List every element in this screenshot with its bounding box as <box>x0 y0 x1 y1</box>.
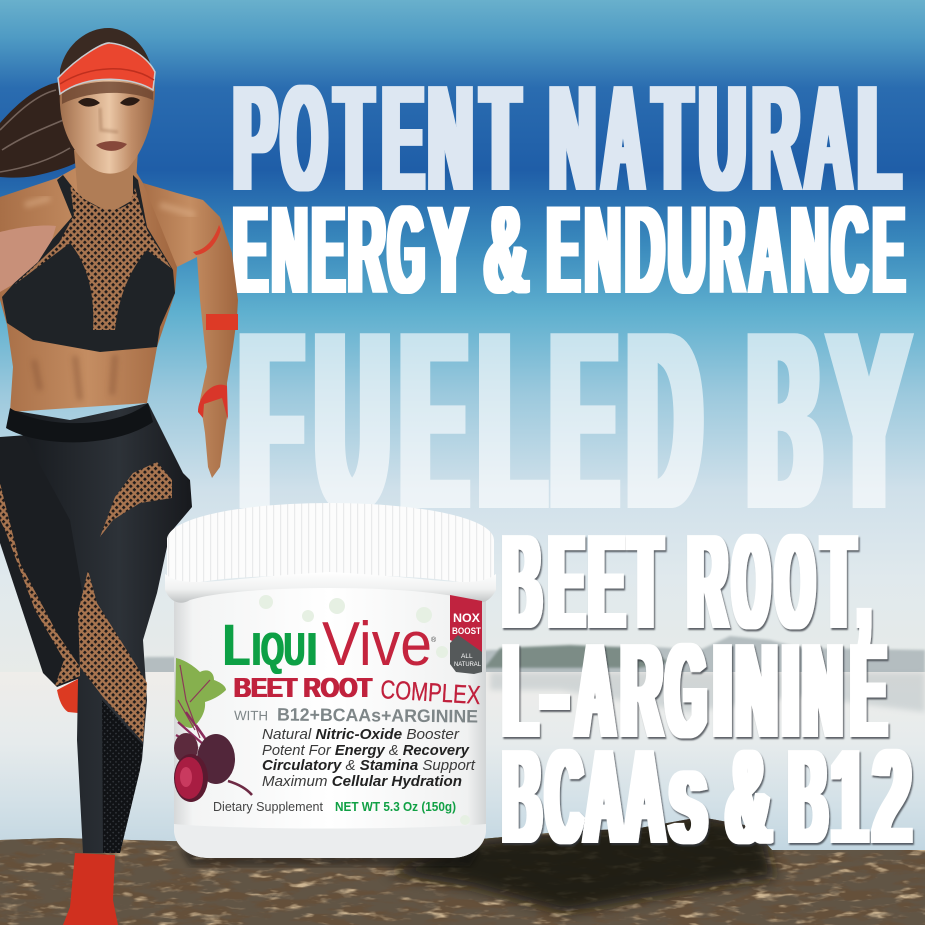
headline: energy and endurance: E <box>547 181 580 320</box>
headline: potent natural: U <box>700 53 746 222</box>
runner: front leg mesh lower <box>78 570 147 742</box>
jar: net weight: NET WT 5.3 Oz (150g) <box>335 799 456 814</box>
runner: shoulder highlights <box>25 198 195 215</box>
ingredient: l-arginine: N <box>736 615 777 766</box>
ingredient: bcaas and b12: A <box>584 721 624 872</box>
headline: energy and endurance: D <box>625 181 664 320</box>
headline: energy and endurance: R <box>348 181 386 320</box>
runner: mouth <box>96 141 127 151</box>
headline: fueled by: U <box>317 278 388 562</box>
headline: potent natural: T <box>482 53 520 222</box>
jar: lower shading <box>174 824 486 858</box>
headline: energy and endurance: Y <box>430 181 468 320</box>
beet: back bulb <box>174 733 198 763</box>
headline: energy and endurance: N <box>272 181 308 320</box>
jar: ground shadow <box>180 850 480 866</box>
headline: energy and endurance: G <box>388 181 424 320</box>
headline: energy and endurance: N <box>585 181 620 320</box>
runner: wristband <box>206 314 238 330</box>
ingredient: l-arginine: L <box>503 615 537 766</box>
runner: rear leg mesh <box>0 483 80 686</box>
jar: nox boost badge: NATURAL <box>454 661 481 668</box>
beet: stems <box>176 712 206 748</box>
ingredient: beet root: O <box>733 506 769 657</box>
runner figure <box>0 28 238 925</box>
headline: fueled by: F <box>241 278 301 562</box>
runner: rear leg <box>0 432 85 687</box>
headline: fueled by: D <box>629 278 700 562</box>
jar: nox boost badge: ALL <box>461 653 473 660</box>
ingredient: beet root: B <box>503 506 541 657</box>
jar: nox boost badge: BOOST <box>452 626 481 636</box>
jar: nox boost badge: NOX <box>453 611 480 625</box>
headline: energy and endurance: C <box>832 181 868 320</box>
jar: dietary supplement: Dietary Supplement <box>213 799 323 814</box>
ingredient: bcaas and b12: s <box>669 721 707 872</box>
runner: front hand <box>0 225 56 292</box>
runner: front leg <box>10 403 192 853</box>
background: sky <box>0 0 925 680</box>
ingredient: bcaas and b12: C <box>546 721 582 872</box>
headline: energy and endurance: E <box>233 181 268 320</box>
runner: front leg mesh upper <box>100 462 172 537</box>
jar: body <box>174 585 486 858</box>
ingredient: bcaas and b12: B <box>789 721 827 872</box>
headline: fueled by: E <box>552 278 616 562</box>
runner: wrist wrap <box>198 385 228 420</box>
runner: shin panel <box>102 700 143 853</box>
headline: energy and endurance: N <box>791 181 828 320</box>
runner: hair <box>60 28 153 84</box>
ingredient: bcaas and b12: B <box>503 721 541 872</box>
runner: visor shadow <box>62 82 153 104</box>
brand: liqui: Q <box>261 623 284 675</box>
background: hill reflection <box>490 672 925 712</box>
headline: energy and endurance: A <box>750 181 786 320</box>
ingredient: bcaas and b12: 1 <box>831 721 867 872</box>
beet: leaves <box>175 658 226 728</box>
headline: energy and endurance: U <box>668 181 706 320</box>
background: sandy beach <box>0 815 925 925</box>
jar: nox boost badge <box>450 595 482 674</box>
jar: beetroot illustration <box>174 658 252 802</box>
runner: waistband <box>6 403 153 442</box>
runner: bra <box>2 175 175 352</box>
ingredient: beet root: T <box>630 506 662 657</box>
background: distant hills <box>0 636 925 682</box>
runner: ponytail <box>0 82 78 178</box>
ingredient: l-arginine: I <box>782 615 799 766</box>
headline: energy and endurance: E <box>312 181 344 320</box>
jar: brand name <box>223 610 437 679</box>
ingredient: beet root: T <box>822 506 854 657</box>
title: complex: COMPLEX <box>380 674 481 710</box>
brand: vive: Vive <box>322 610 432 679</box>
beet: cut slice <box>174 754 208 802</box>
beet: leaf veins <box>178 665 210 738</box>
runner: boot <box>63 853 118 925</box>
jar: decorative molecule dots <box>259 595 470 825</box>
runner: raised foot <box>57 678 80 713</box>
runner: visor fold <box>60 69 154 84</box>
headline: potent natural: E <box>382 53 424 222</box>
runner: head <box>60 78 155 174</box>
beet: main bulb <box>197 734 235 784</box>
jar: subtitle: WITH <box>234 708 268 723</box>
headline: potent natural: P <box>234 53 276 222</box>
brand: registered mark: ® <box>431 636 437 644</box>
jar: product title <box>234 672 481 710</box>
ingredient: bcaas and b12: A <box>624 721 664 872</box>
headline: potent natural: T <box>654 53 692 222</box>
ingredient: beet root: R <box>688 506 727 657</box>
brand: liqui: L <box>223 613 250 678</box>
headline: potent natural: N <box>550 53 596 222</box>
runner: abdomen shading <box>34 355 115 400</box>
runner: torso <box>0 167 177 412</box>
runner: nose shadow <box>100 108 118 132</box>
headline: energy and endurance: & <box>484 181 528 320</box>
runner: neck <box>74 150 138 214</box>
runner: visor <box>58 43 155 94</box>
title: beet root: BEET ROOT <box>234 672 372 703</box>
runner: armband upper <box>193 225 221 255</box>
jar: benefit lines <box>262 726 476 790</box>
headline: fueled by: L <box>480 278 544 562</box>
ingredient list <box>503 506 911 872</box>
runner: bra mesh <box>14 184 171 330</box>
headline: potent natural: R <box>752 53 800 222</box>
beet: root tail <box>228 781 252 795</box>
headline: potent natural: A <box>806 53 852 222</box>
ingredient: l-arginine: G <box>666 615 706 766</box>
ingredient: l-arginine: A <box>576 615 614 766</box>
ingredient: l-arginine: I <box>713 615 732 766</box>
ingredient: l-arginine: - <box>540 615 569 766</box>
ingredient: bcaas and b12: & <box>726 721 771 872</box>
brand: liqui: U <box>284 623 305 675</box>
brand: liqui: I <box>307 623 317 675</box>
headline: energy and endurance: R <box>710 181 744 320</box>
headline: fueled by: E <box>402 278 466 562</box>
background: lake <box>0 672 925 850</box>
jar: lid ribs <box>167 503 494 587</box>
ingredient: beet root: E <box>589 506 624 657</box>
headline: potent natural: O <box>282 53 326 222</box>
headline: potent natural: N <box>428 53 472 222</box>
jar: benefit lines: Circulatory & Stamina Support <box>262 757 476 774</box>
ingredient: l-arginine: R <box>621 615 662 766</box>
jar: benefit lines: Maximum Cellular Hydration <box>262 773 462 790</box>
runner: arm <box>143 183 238 478</box>
jar: benefit lines: Natural Nitric-Oxide Booster <box>262 726 460 743</box>
headline: potent natural: T <box>336 53 372 222</box>
ingredient: beet root: E <box>549 506 584 657</box>
jar: subtitle: B12+BCAAs+ARGININE <box>277 704 478 727</box>
ingredient list: , <box>858 506 870 657</box>
jar: lid rim <box>165 572 496 603</box>
ingredient: beet root: O <box>776 506 814 657</box>
ingredient: l-arginine: N <box>803 615 842 766</box>
product jar <box>165 503 496 866</box>
brand: liqui: I <box>252 623 261 675</box>
jar: benefit lines: Potent For Energy & Recovery <box>262 742 470 759</box>
runner: eyes <box>78 97 140 107</box>
headline: potent natural: A <box>602 53 644 222</box>
